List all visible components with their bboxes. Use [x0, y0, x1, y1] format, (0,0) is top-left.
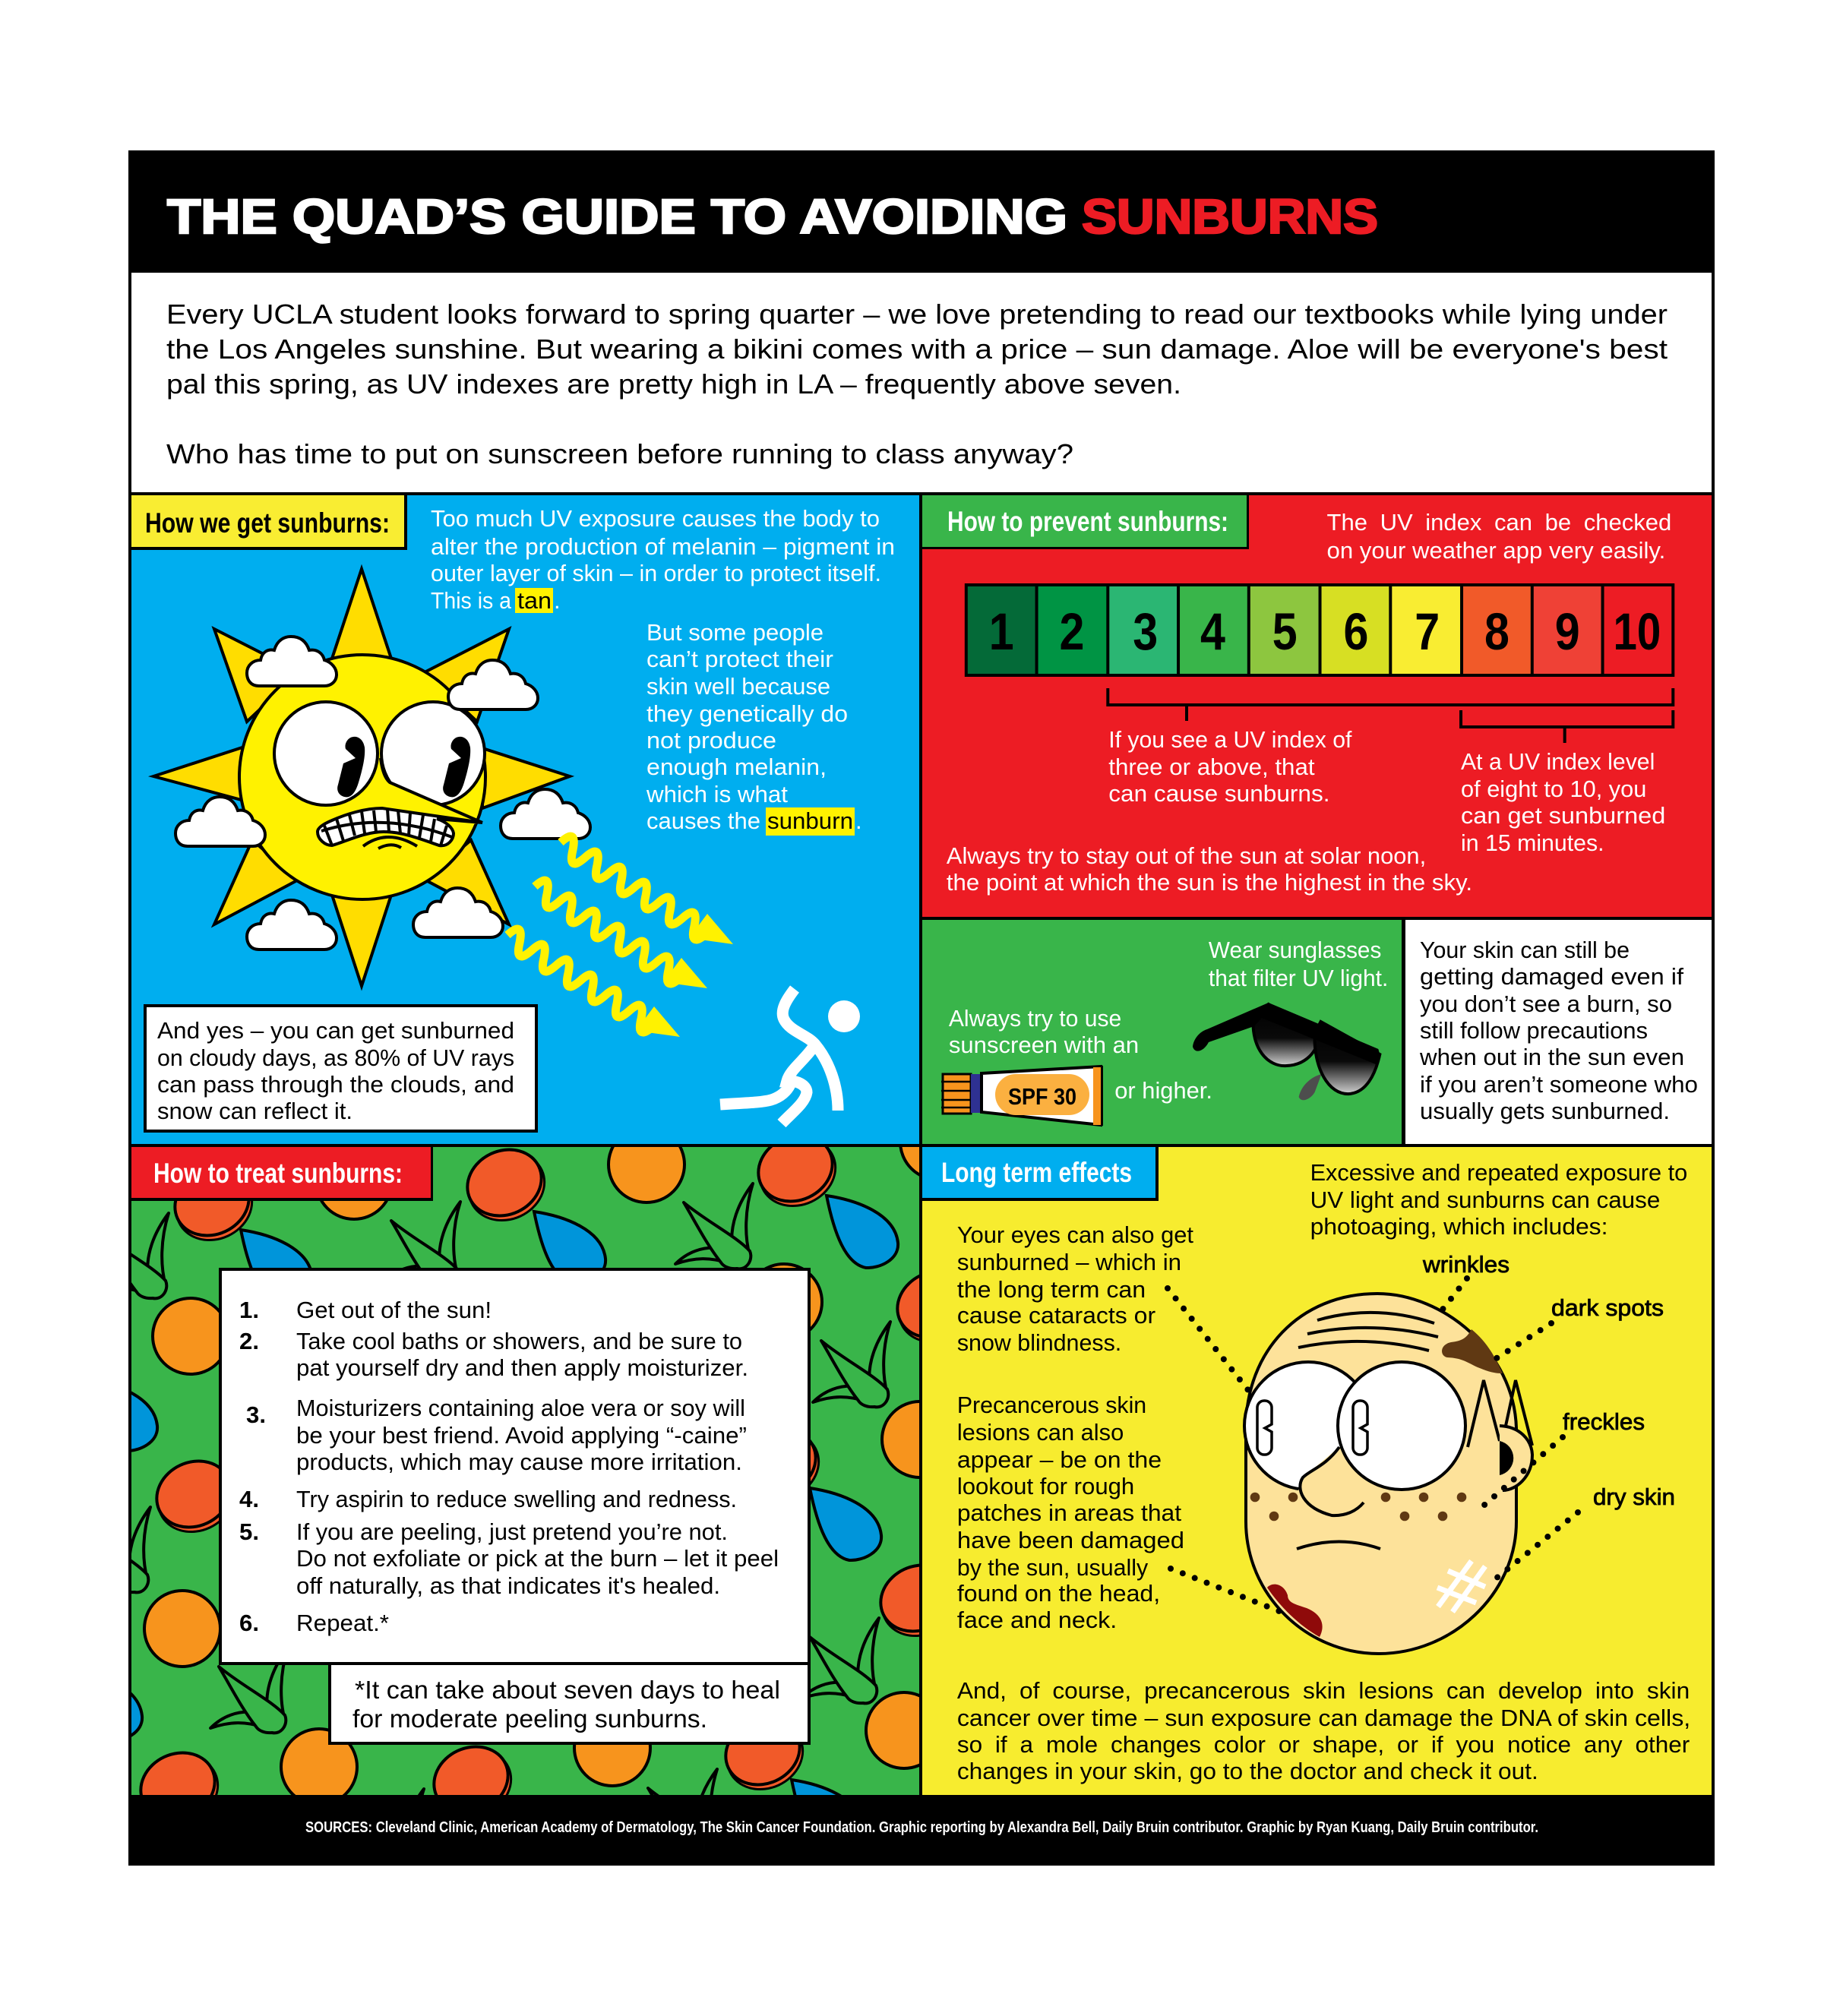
text: precancerous lesions: lesions can also [957, 1419, 1124, 1446]
list: treatment steps: Do not exfoliate or pick at the burn – let it peel [296, 1545, 779, 1572]
title: THE QUAD’S GUIDE TO AVOIDING [167, 189, 1067, 244]
intro text: Who has time to put on sunscreen before running to class anyway? [166, 438, 1073, 469]
footer: sources: SOURCES: Cleveland Clinic, American Academy of Dermatology, The Skin Cancer Foundation. Graphic reporting by Alexandra Bell, Daily Bruin contributor. Graphic by Ryan Kuang, Daily Bruin contributor. [305, 1819, 1538, 1836]
label: wrinkles: wrinkles [1422, 1251, 1509, 1278]
chart: UV index scale: 2 [1059, 602, 1084, 661]
text: UV index check: The UV index can be checked [1327, 509, 1671, 536]
list: treatment steps: If you are peeling, just pretend you’re not. [296, 1518, 728, 1545]
text: melanin and tan [431, 505, 895, 614]
label: freckles: freckles [1563, 1408, 1645, 1435]
nose [1300, 1447, 1364, 1515]
text: solar noon: the point at which the sun is the highest in the sky. [947, 869, 1472, 896]
text: skin cancer: changes in your skin, go to the doctor and check it out. [957, 1758, 1538, 1784]
bracket: eight to ten [1461, 710, 1673, 743]
label: dry skin: dry skin [1593, 1484, 1675, 1510]
text: precancerous lesions: Precancerous skin [957, 1392, 1146, 1418]
list: treatment steps: Repeat.* [296, 1610, 389, 1636]
dotted leader lines [1168, 1278, 1578, 1616]
panel: skin damage note: usually gets sunburned. [1420, 1098, 1670, 1124]
lesion [1267, 1585, 1323, 1637]
text: genetics and sunburn: skin well because [646, 673, 830, 700]
wrinkles [1298, 1313, 1438, 1351]
text: skin cancer: so if a mole changes color or shape, or if you notice any other [957, 1731, 1690, 1758]
callout: cloudy days: snow can reflect it. [157, 1098, 352, 1124]
list: treatment steps: off naturally, as that indicates it's healed. [296, 1572, 720, 1599]
text: index of three [1108, 726, 1352, 807]
text: solar noon [947, 842, 1472, 896]
text: melanin and tan: This is a [431, 587, 512, 614]
panel: skin damage note: Your skin can still be [1420, 937, 1630, 963]
ear [1500, 1426, 1532, 1490]
text: precancerous lesions: face and neck. [957, 1607, 1117, 1633]
callout: cloudy days [145, 1006, 536, 1131]
text: index of eight to ten: in 15 minutes. [1461, 829, 1604, 856]
text: UV index check [1327, 509, 1671, 564]
text: melanin and tan: outer layer of skin – in order to protect itself. [431, 560, 881, 586]
list: treatment steps: 5. [239, 1518, 259, 1545]
panel: long term effects [922, 1147, 1712, 1795]
text: sunglasses: that filter UV light. [1209, 965, 1388, 991]
intro text: the Los Angeles sunshine. But wearing a bikini comes with a price – sun damage. Aloe will be everyone's best [166, 333, 1668, 365]
title [167, 189, 1378, 244]
icon: sun with clouds [153, 569, 590, 986]
heading: long term effects [922, 1147, 1159, 1201]
chart: UV index scale: 7 [1415, 602, 1440, 661]
text: genetics and sunburn: sunburn [767, 807, 853, 834]
text: genetics and sunburn: not produce [646, 727, 776, 754]
panel: skin damage note [1405, 920, 1712, 1144]
text: precancerous lesions: found on the head, [957, 1580, 1160, 1607]
text: skin cancer [957, 1677, 1690, 1784]
panel: how to prevent sunburns [922, 495, 1712, 917]
panel: how to treat sunburns [131, 1147, 919, 1795]
dry skin patch [1437, 1561, 1485, 1612]
text: eyes [957, 1221, 1193, 1356]
text: eyes: snow blindness. [957, 1329, 1121, 1356]
mouth [1297, 1542, 1380, 1549]
text: skin cancer: cancer over time – sun exposure can damage the DNA of skin cells, [957, 1705, 1690, 1731]
icon: SPF 30 sunscreen tube [941, 1066, 1103, 1126]
background pattern: oranges, drops, leaves [131, 1147, 919, 1795]
panel: introduction [131, 273, 1712, 492]
text: genetics and sunburn: they genetically do [646, 700, 848, 727]
intro text: pal this spring, as UV indexes are pretty high in LA – frequently above seven. [166, 368, 1181, 400]
list: treatment steps: 6. [239, 1610, 259, 1636]
text: genetics and sunburn [646, 619, 862, 836]
icon: sunglasses [1193, 1003, 1380, 1100]
text: genetics and sunburn: . [855, 807, 862, 834]
dark spot [1442, 1329, 1503, 1373]
text: index of three: can cause sunburns. [1108, 780, 1330, 807]
panel: skin damage note: when out in the sun even [1419, 1044, 1684, 1070]
list: treatment steps: 3. [246, 1401, 266, 1428]
list: treatment steps: be your best friend. Avoid applying “-caine” [296, 1422, 747, 1449]
text: photoaging: Excessive and repeated exposure to [1310, 1159, 1687, 1186]
text: photoaging: photoaging, which includes: [1310, 1213, 1608, 1240]
intro text: Every UCLA student looks forward to spring quarter – we love pretending to read our textbooks while lying under [166, 299, 1668, 330]
list: treatment steps: 1. [239, 1297, 259, 1323]
panel: skin damage note: if you aren’t someone who [1420, 1071, 1698, 1098]
text: UV index check: on your weather app very easily. [1327, 537, 1665, 564]
panel: how we get sunburns [131, 495, 919, 1144]
text: precancerous lesions: patches in areas that [957, 1499, 1181, 1526]
chart: UV index scale: 9 [1555, 602, 1580, 661]
heading: how we get sunburns: How we get sunburns: [145, 507, 390, 539]
text: melanin and tan: alter the production of melanin – pigment in [431, 533, 895, 560]
footnote: healing time: *It can take about seven days to heal [355, 1676, 780, 1704]
text: skin cancer: And, of course, precancerous skin lesions can develop into skin [957, 1677, 1690, 1704]
text: eyes: cause cataracts or [957, 1302, 1155, 1329]
list: treatment steps: Try aspirin to reduce swelling and redness. [296, 1486, 737, 1512]
icon: running figure [720, 989, 860, 1123]
list: treatment steps: Get out of the sun! [296, 1297, 492, 1323]
panel: skin damage note: still follow precautions [1420, 1017, 1648, 1044]
text: photoaging: UV light and sunburns can cause [1310, 1187, 1660, 1213]
bracket: three and above [1108, 688, 1673, 721]
text: precancerous lesions [957, 1392, 1184, 1633]
heading: how to treat sunburns: How to treat sunburns: [153, 1158, 403, 1189]
text: index of eight to ten: of eight to 10, you [1461, 776, 1646, 802]
text: melanin and tan: . [554, 587, 561, 614]
label: dark spots: dark spots [1551, 1294, 1664, 1321]
title: SUNBURNS [1082, 189, 1378, 244]
list: treatment steps: 2. [239, 1328, 259, 1354]
text: index of eight to ten [1461, 748, 1665, 856]
page frame [128, 150, 1715, 1866]
panel: sunscreen and sunglasses [922, 920, 1402, 1144]
heading: how to prevent sunburns [922, 495, 1249, 549]
text: genetics and sunburn: can’t protect their [646, 646, 833, 672]
text: index of three: three or above, that [1108, 754, 1315, 780]
text: index of eight to ten: can get sunburned [1461, 802, 1665, 829]
text: melanin and tan: tan [517, 587, 552, 614]
sideburn [1468, 1380, 1500, 1447]
text: solar noon: Always try to stay out of the sun at solar noon, [947, 842, 1426, 869]
chart: UV index scale: 8 [1484, 602, 1509, 661]
heading: how we get sunburns [131, 495, 407, 550]
chart: UV index scale: 3 [1133, 602, 1158, 661]
text: precancerous lesions: appear – be on the [957, 1446, 1162, 1473]
callout: cloudy days: can pass through the clouds, and [157, 1071, 514, 1098]
list: treatment steps: pat yourself dry and then apply moisturizer. [296, 1354, 748, 1381]
list: treatment steps: products, which may cause more irritation. [296, 1449, 742, 1475]
text: precancerous lesions: lookout for rough [957, 1473, 1134, 1499]
text: genetics and sunburn: causes the [646, 807, 760, 834]
text: genetics and sunburn: which is what [646, 781, 788, 807]
list: treatment steps: Moisturizers containing aloe vera or soy will [296, 1395, 745, 1421]
hair tuft [1506, 1380, 1532, 1446]
chart: UV index scale: 10 [1613, 602, 1661, 661]
text: sunscreen: or higher. [1114, 1077, 1212, 1104]
text: sunglasses [1209, 937, 1388, 991]
text: precancerous lesions: by the sun, usually [957, 1554, 1149, 1581]
text: genetics and sunburn: But some people [646, 619, 824, 646]
icon: UV rays [507, 836, 733, 1037]
intro text [166, 299, 1668, 469]
footnote: healing time [330, 1664, 809, 1743]
icon: SPF 30 sunscreen tube: SPF 30 [1008, 1083, 1076, 1110]
chart: UV index scale [965, 583, 1674, 677]
text: eyes: Your eyes can also get [957, 1221, 1193, 1248]
illustration: sun-damaged face [1244, 1294, 1532, 1654]
chart: UV index scale: 4 [1200, 602, 1225, 661]
text: melanin and tan: Too much UV exposure causes the body to [431, 505, 880, 532]
chart: UV index scale: 6 [1343, 602, 1368, 661]
list: treatment steps: 4. [239, 1486, 259, 1512]
text: precancerous lesions: have been damaged [957, 1527, 1184, 1553]
text: sunscreen: sunscreen with an [949, 1032, 1139, 1058]
footnote: healing time: for moderate peeling sunburns. [352, 1705, 707, 1733]
panel: skin damage note: you don’t see a burn, so [1420, 991, 1672, 1017]
callout: cloudy days: on cloudy days, as 80% of UV rays [157, 1044, 514, 1071]
list: treatment steps: Take cool baths or showers, and be sure to [296, 1328, 742, 1354]
chart: UV index scale: 5 [1272, 602, 1298, 661]
text: sunscreen: Always try to use [949, 1005, 1121, 1032]
text: index of eight to ten: At a UV index level [1461, 748, 1655, 775]
text: sunscreen [949, 1005, 1212, 1104]
text: sunglasses: Wear sunglasses [1209, 937, 1381, 963]
list: treatment steps [220, 1269, 809, 1664]
text: eyes: the long term can [957, 1276, 1146, 1303]
freckles [1250, 1493, 1466, 1521]
chart: UV index scale: 1 [989, 602, 1014, 661]
heading: long term effects: Long term effects [941, 1157, 1132, 1188]
heading: how to treat sunburns [131, 1147, 433, 1201]
text: eyes: sunburned – which in [957, 1249, 1181, 1275]
text: photoaging [1310, 1159, 1687, 1240]
panel: skin damage note: getting damaged even if [1420, 963, 1683, 990]
text: index of three: If you see a UV index of [1108, 726, 1352, 753]
callout: cloudy days: And yes – you can get sunburned [157, 1017, 514, 1044]
heading: how to prevent sunburns: How to prevent sunburns: [947, 506, 1228, 537]
text: genetics and sunburn: enough melanin, [646, 754, 827, 780]
